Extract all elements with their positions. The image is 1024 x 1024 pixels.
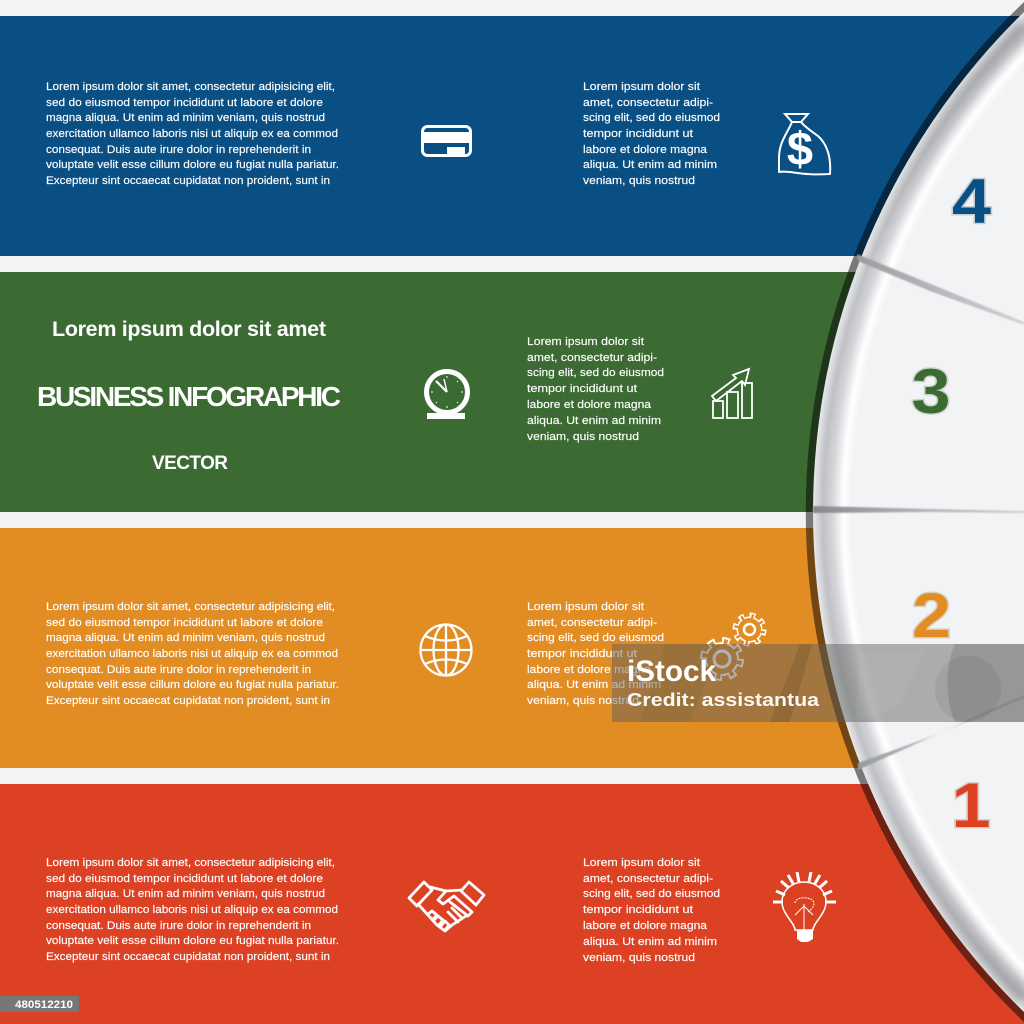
icon: money bag [779,114,830,175]
text block: band 2 left: magna aliqua. Ut enim ad minim veniam, quis nostrud [46,632,325,644]
text block: band 3 right: amet, consectetur adipi- [527,352,657,364]
text block: band 4 right: veniam, quis nostrud [583,175,695,187]
text block: band 2 right: veniam, quis nostrud [527,695,639,707]
icon: money bag: $ [787,122,813,175]
segment divider 3-2 [813,506,1024,513]
text block: band 2 right: Lorem ipsum dolor sit [527,601,645,613]
text block: band 4 right: tempor incididunt ut [583,128,694,140]
icon: clock [426,372,468,419]
text block: band 3 right: tempor incididunt ut [527,383,638,395]
text block: band 2 right: aliqua. Ut enim ad minim [527,679,661,691]
number 4: 4 [952,167,991,237]
segment divider 2-1 [858,695,1024,770]
number 3: 3 [912,357,950,427]
text block: band 4 left: consequat. Duis aute irure dolor in reprehenderit in [46,144,311,156]
text block: band 1 left: Excepteur sint occaecat cupidatat non proident, sunt in [46,951,330,963]
text block: band 2 right: amet, consectetur adipi- [527,617,657,629]
text block: band 3 right: Lorem ipsum dolor sit [527,336,645,348]
text block: band 2 left: Excepteur sint occaecat cupidatat non proident, sunt in [46,695,330,707]
watermark: credit: Credit: assistantua [627,689,820,710]
text block: band 1 left: magna aliqua. Ut enim ad minim veniam, quis nostrud [46,888,325,900]
panel: wheel [813,12,1024,1012]
text block: band 2 left: sed do eiusmod tempor incididunt ut labore et dolore [46,617,323,629]
text block: band 4 right: amet, consectetur adipi- [583,97,713,109]
text block: band 1 right: aliqua. Ut enim ad minim [583,936,717,948]
stock id tag: 480512210 [15,999,73,1011]
text block: band 4 left: magna aliqua. Ut enim ad minim veniam, quis nostrud [46,112,325,124]
text block: band 4 left: sed do eiusmod tempor incididunt ut labore et dolore [46,97,323,109]
text block: band 2 right: labore et dolore magna [527,664,652,676]
text block: band 1 right: veniam, quis nostrud [583,952,695,964]
text block: band 1 right: tempor incididunt ut [583,904,694,916]
text block: band 1 right: labore et dolore magna [583,920,708,932]
icon: light bulb [773,872,836,942]
shadow rim of the wheel [806,2,1024,1022]
text block: band 3 right: scing elit, sed do eiusmod [527,367,664,379]
text block: band 4 right [583,81,720,187]
watermark: iStock: iStock [627,655,716,688]
watermark band [612,644,1024,722]
icon: globe [420,624,472,676]
text block: band 4 left: voluptate velit esse cillum dolore eu fugiat nulla pariatur. [46,159,339,171]
text block: band 1 left: exercitation ullamco laboris nisi ut aliquip ex ea commod [46,904,338,916]
text block: band 1 right: amet, consectetur adipi- [583,873,713,885]
stock id tag [0,996,79,1012]
text block: band 2 right [527,601,664,707]
text block: band 2 left: voluptate velit esse cillum dolore eu fugiat nulla pariatur. [46,679,339,691]
icon: gears [702,614,764,678]
number 1: 1 [952,771,990,841]
panel: band 1 red [0,784,1024,1024]
text block: band 4 left [46,81,339,187]
number 2: 2 [912,581,951,651]
text block: band 4 right: labore et dolore magna [583,144,708,156]
wheel outer shading [898,19,1024,1005]
icon: growth chart [712,369,752,418]
segment divider 4-3 [857,254,1024,325]
text block: band 1 left: voluptate velit esse cillum dolore eu fugiat nulla pariatur. [46,935,339,947]
text block: band 4 left: Excepteur sint occaecat cupidatat non proident, sunt in [46,175,330,187]
text block: band 3 right: veniam, quis nostrud [527,431,639,443]
panel: band 3 green [0,272,1024,512]
text block: band 1 left: consequat. Duis aute irure dolor in reprehenderit in [46,920,311,932]
icon: small gear [734,614,764,644]
text block: band 4 left: Lorem ipsum dolor sit amet, consectetur adipisicing elit, [46,81,335,93]
text block: band 4 right: Lorem ipsum dolor sit [583,81,701,93]
text block: band 2 left: exercitation ullamco laboris nisi ut aliquip ex ea commod [46,648,338,660]
text block: band 4 left: exercitation ullamco laboris nisi ut aliquip ex ea commod [46,128,338,140]
text block: band 2 left: Lorem ipsum dolor sit amet, consectetur adipisicing elit, [46,601,335,613]
text block: band 1 left: sed do eiusmod tempor incididunt ut labore et dolore [46,873,323,885]
text block: band 2 left: consequat. Duis aute irure dolor in reprehenderit in [46,664,311,676]
icon: credit card [422,126,471,156]
heading: vector: VECTOR [152,453,228,474]
text block: band 2 right: scing elit, sed do eiusmod [527,632,664,644]
text block: band 3 right: aliqua. Ut enim ad minim [527,415,661,427]
text block: band 1 right: Lorem ipsum dolor sit [583,857,701,869]
icon: large gear [702,640,742,678]
text block: band 3 right [527,336,664,443]
text block: band 1 left [46,857,339,963]
panel: band 2 orange [0,528,1024,768]
panel: band 4 blue [0,16,1024,256]
text block: band 2 left [46,601,339,707]
text block: band 4 right: aliqua. Ut enim ad minim [583,159,717,171]
text block: band 1 right [583,857,720,964]
icon: handshake [409,882,484,931]
text block: band 2 right: tempor incididunt ut [527,648,638,660]
text block: band 1 left: Lorem ipsum dolor sit amet, consectetur adipisicing elit, [46,857,335,869]
text block: band 1 right: scing elit, sed do eiusmod [583,888,720,900]
heading: subtitle: Lorem ipsum dolor sit amet [52,317,326,341]
text block: band 3 right: labore et dolore magna [527,399,652,411]
heading: title: BUSINESS INFOGRAPHIC [37,381,341,412]
text block: band 4 right: scing elit, sed do eiusmod [583,112,720,124]
